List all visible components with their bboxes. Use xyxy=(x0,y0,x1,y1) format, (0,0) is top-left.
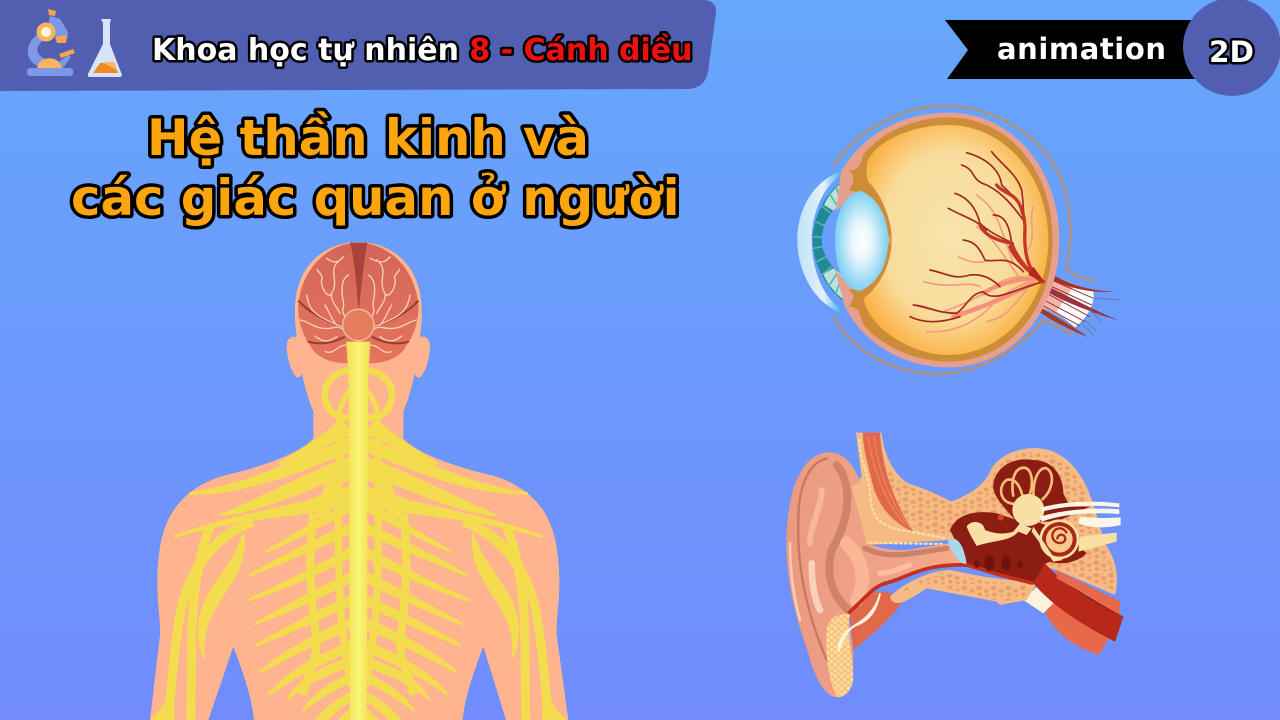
retinal vessels xyxy=(910,152,1045,332)
vestibule xyxy=(1012,494,1044,526)
circle xyxy=(1183,0,1280,96)
choroid xyxy=(848,117,1053,362)
icon: microscope xyxy=(27,9,75,76)
lens xyxy=(835,191,888,291)
ribbon xyxy=(945,20,1205,79)
outer ear shading xyxy=(790,458,947,660)
header banner xyxy=(0,0,716,91)
labyrinth xyxy=(993,459,1090,522)
cochlea xyxy=(1032,519,1079,562)
cornea xyxy=(797,172,842,313)
cavity dark spots xyxy=(974,555,1023,571)
dotted cartilage edge xyxy=(859,440,947,544)
outer membrane line xyxy=(833,106,1097,374)
iris xyxy=(813,178,848,301)
lower bone xyxy=(890,570,1037,605)
earlobe xyxy=(826,614,853,697)
bone pores xyxy=(885,452,1114,590)
header text: Khoa học tự nhiên 8 - Cánh diều xyxy=(152,33,692,68)
eye diagram xyxy=(797,106,1120,374)
icon: flask xyxy=(88,19,122,77)
lower muscle group xyxy=(850,592,903,650)
title line 1: Hệ thần kinh và xyxy=(147,109,589,167)
auricular muscle xyxy=(863,433,913,532)
body silhouette xyxy=(150,242,568,720)
middle ear cavity xyxy=(950,512,1123,642)
vitreous body xyxy=(863,125,1048,355)
cochlear nerve xyxy=(1078,533,1117,552)
auditory nerves xyxy=(1040,502,1121,527)
badge: animation 2D xyxy=(945,0,1280,96)
semicircular canals xyxy=(1001,468,1052,504)
ossicles xyxy=(967,522,1032,546)
canal red lining xyxy=(848,565,1033,613)
sclera xyxy=(835,113,1059,367)
ear diagram xyxy=(786,433,1123,697)
circle text: 2D xyxy=(1209,35,1254,69)
outer ear xyxy=(786,452,967,697)
tendon xyxy=(1023,583,1055,613)
eardrum xyxy=(948,539,967,564)
optic nerve xyxy=(1037,275,1120,337)
brain stem xyxy=(343,309,374,341)
human body with nervous system xyxy=(150,242,568,720)
title line 2: các giác quan ở người xyxy=(71,169,680,227)
nerves xyxy=(152,370,565,720)
cartilage strip xyxy=(838,593,880,652)
banner shape xyxy=(0,0,716,91)
ribbon text: animation xyxy=(997,32,1166,66)
temporal bone xyxy=(852,433,1117,595)
eustachian tube xyxy=(1033,563,1123,642)
tube muscle lines xyxy=(1057,570,1120,613)
spinal cord xyxy=(346,340,371,720)
brain xyxy=(298,243,418,363)
title xyxy=(71,109,680,227)
